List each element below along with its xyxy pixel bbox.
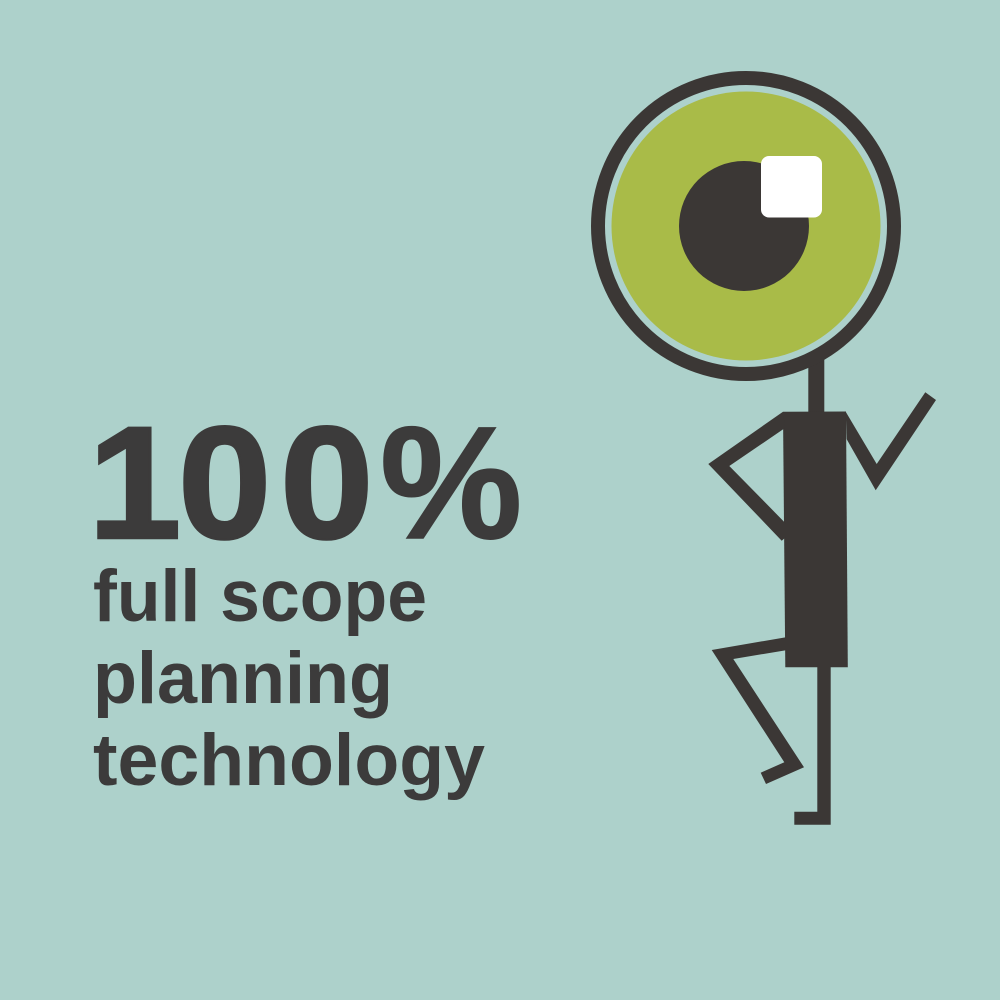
left arm on hip: [708, 412, 786, 541]
body: [783, 412, 848, 667]
subtitle text: technology: [93, 720, 485, 801]
bent leg: [712, 637, 804, 784]
right arm raised: [846, 392, 936, 490]
figure: stick character with eye head: [598, 78, 936, 825]
subtitle text: planning: [93, 638, 393, 719]
eye: head: [598, 78, 894, 374]
standing leg and foot: [794, 665, 831, 825]
subtitle text: [93, 556, 485, 801]
headline: 100%: %: [380, 393, 522, 572]
neck: [808, 358, 824, 414]
headline: 100%: 100: [88, 393, 373, 572]
subtitle text: full scope: [93, 556, 427, 637]
headline: 100%: [88, 393, 522, 572]
